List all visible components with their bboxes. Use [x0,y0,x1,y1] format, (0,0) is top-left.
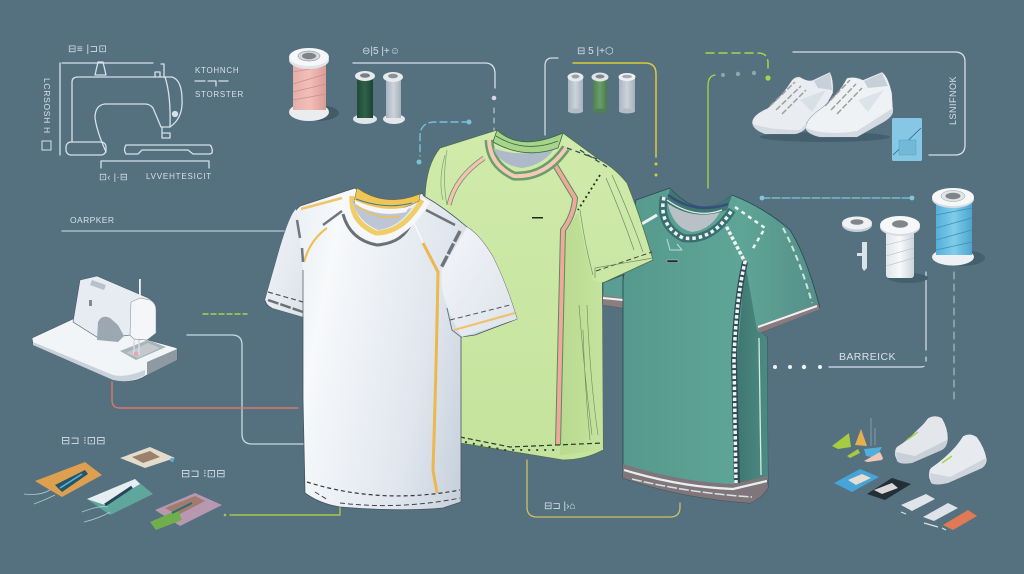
sewing machine line drawing [60,62,233,168]
label: OARPKER: OARPKER [70,215,114,225]
thread spool labels: ⊟ 5 |+⬡ [577,46,614,57]
isometric sewing machine [32,276,177,381]
connector dots [224,71,914,516]
t-shirt: green [425,130,653,460]
spool: white [880,216,928,283]
spool: pink [289,48,339,121]
button and hook [842,216,872,271]
spool: blue [932,188,985,266]
machine diagram labels [42,44,244,183]
thread spool labels: ⊖|5 |+☺ [362,46,400,57]
thread spool labels [362,46,614,57]
zipper packs [24,447,222,530]
zipper pack labels: ⊟⊐ ⁝⊡⊟ [181,468,226,480]
zipper pack labels: ⊟⊐ ⁝⊡⊟ [61,435,106,447]
machine diagram labels: ⊡‹ |·⊟ [99,172,128,183]
t-shirt: white [265,188,517,510]
spool: grey [383,72,405,124]
t-shirt: teal [603,188,820,503]
machine diagram labels: STORSTER [195,90,244,99]
machine diagram labels: KTOHNCH [195,66,239,75]
machine diagram labels: ⊟≡ |⊐⊡ [68,44,107,55]
spool: dark green [353,71,377,124]
bottom centre label icons: ⊟⊐ |›⌂ [544,501,576,512]
machine diagram labels: LCRSOSH H [42,78,52,134]
connector lines [62,52,965,517]
small accessories [832,418,977,530]
shoes: lower pair [895,416,987,484]
machine diagram labels: LVVEHTESICIT [146,172,212,181]
spool trio: grey, green, grey [568,72,636,114]
blue swatch card [892,118,922,161]
zipper pack labels [61,435,226,480]
shoes: top pair [752,72,893,142]
rotated label: LSNIFNOK: LSNIFNOK [948,76,958,125]
label: BARREICK: BARREICK [839,351,896,363]
